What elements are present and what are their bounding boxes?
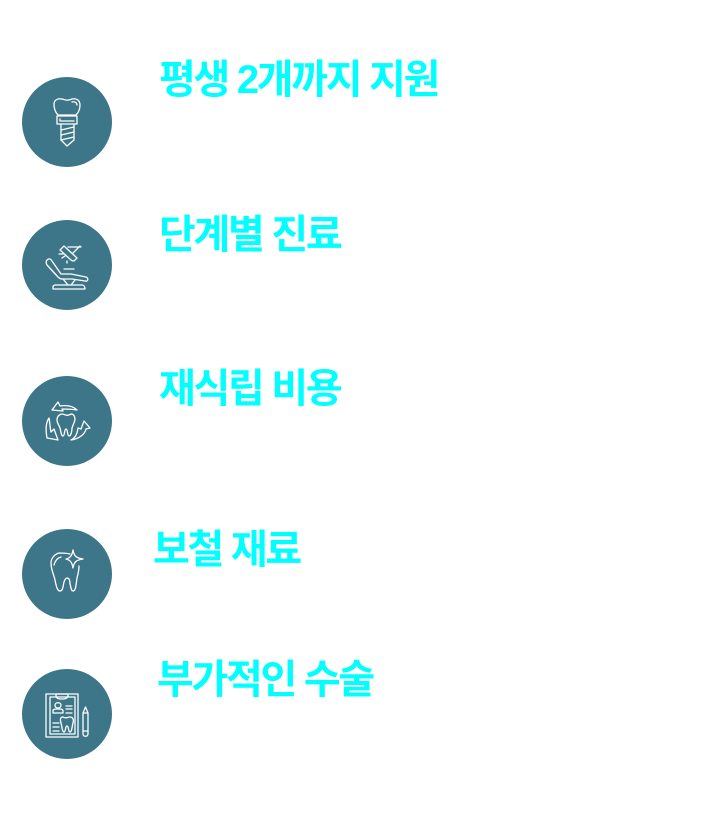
heading: 단계별 진료: 단계별 진료 [159, 213, 340, 257]
heading: 보철 재료: 보철 재료 [153, 528, 300, 572]
heading: 평생 2개까지 지원: 평생 2개까지 지원 [159, 58, 438, 102]
icon: clipboard with dental chart and pencil [22, 669, 112, 759]
icon: dental implant [22, 77, 112, 167]
icon: tooth with rotating arrows [22, 376, 112, 466]
heading: 부가적인 수술: 부가적인 수술 [157, 658, 373, 702]
heading: 재식립 비용: 재식립 비용 [159, 367, 340, 411]
icon: sparkling tooth [22, 529, 112, 619]
icon: dental chair [22, 220, 112, 310]
